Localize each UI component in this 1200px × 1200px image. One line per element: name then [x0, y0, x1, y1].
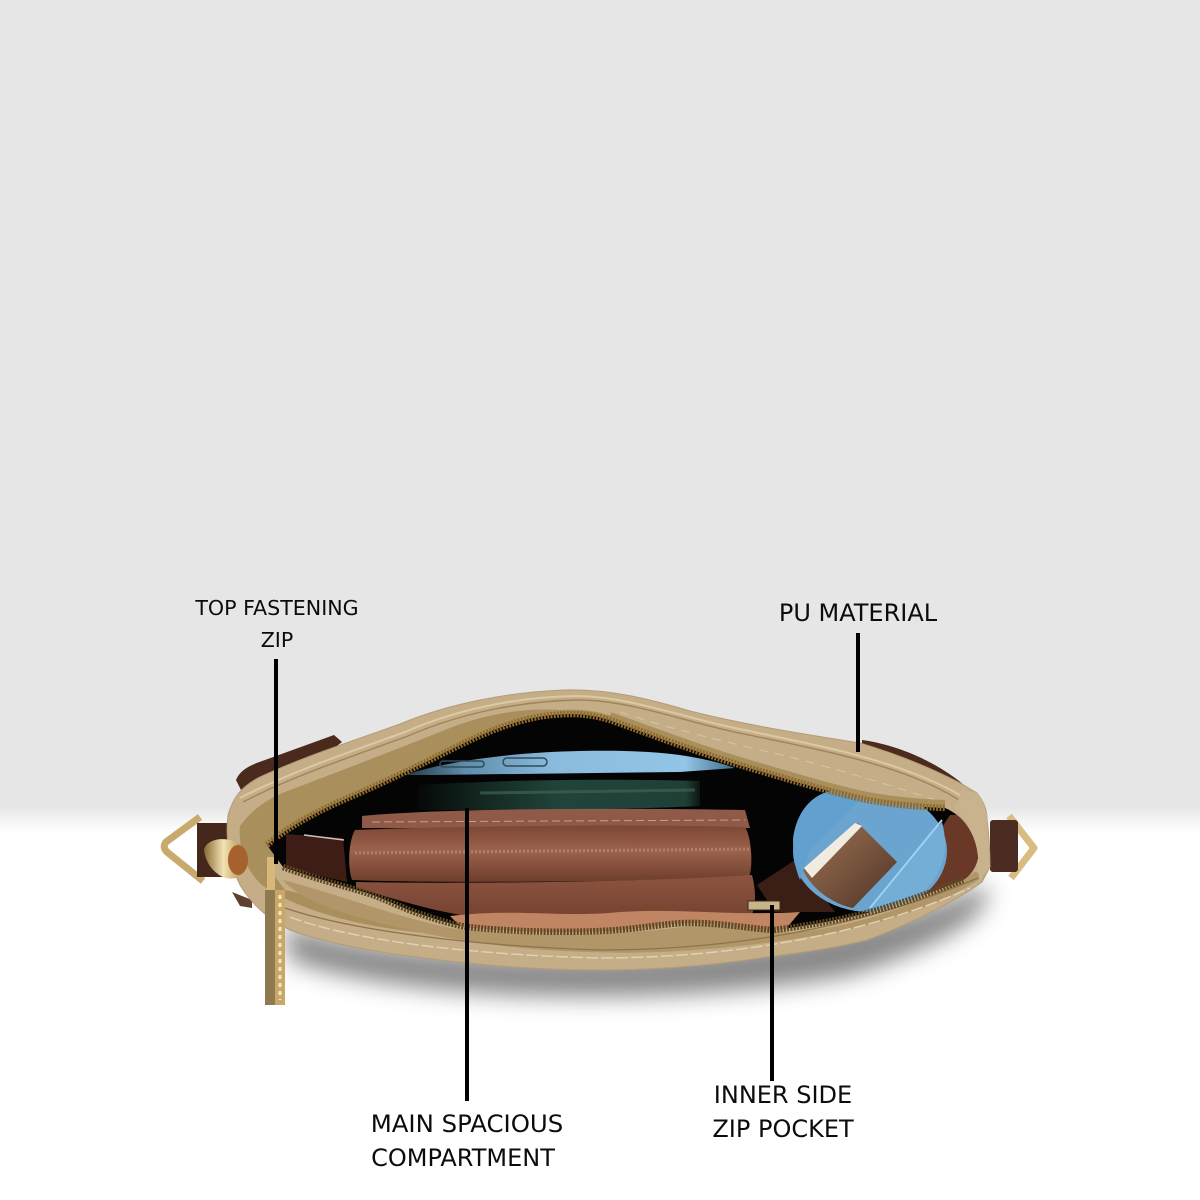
zip tape left, wide: [240, 710, 640, 940]
callout: top fastening zip: TOP FASTENING: [194, 596, 359, 620]
brown wallet lower: [356, 875, 755, 915]
callout: top fastening zip: ZIP: [261, 628, 293, 652]
copper lining fold: [450, 910, 800, 932]
top zip teeth: [267, 714, 945, 845]
green notebook: [418, 780, 700, 810]
flap stitches: [620, 712, 935, 800]
inner pocket zip puller: [748, 901, 780, 910]
icon: right triangular ring: [1009, 816, 1034, 878]
callout: main spacious compartment: [371, 808, 563, 1172]
callout: PU material: [779, 599, 938, 752]
brown wallet flap: [362, 809, 750, 828]
zip pull bar: [265, 857, 285, 1005]
top zip tape: [610, 716, 945, 804]
icon: small brown nub: [232, 892, 252, 908]
icon: left triangular ring: [164, 817, 203, 881]
interior dark: [267, 714, 978, 932]
callout: main spacious compartment: MAIN SPACIOUS: [371, 1109, 563, 1138]
bag mouth interior: [267, 714, 978, 932]
bag illustration: [164, 690, 1034, 1005]
icon: left strap end: [197, 823, 227, 877]
right side lighter edge: [955, 790, 990, 880]
bottom lip seam: [290, 888, 970, 958]
callout: inner side zip pocket: ZIP POCKET: [712, 1115, 854, 1143]
bottle cork insert: [803, 823, 897, 908]
bag body outer: [227, 690, 990, 970]
callout: PU material: PU MATERIAL: [779, 599, 938, 627]
blue bottle lid: [793, 790, 947, 912]
callout: main spacious compartment: COMPARTMENT: [371, 1144, 555, 1172]
callout: inner side zip pocket: [712, 905, 854, 1143]
top flap seam: [240, 696, 978, 808]
bottom pocket lip shading: [283, 872, 985, 953]
bottle light right segment: [872, 822, 945, 908]
right lining: [926, 815, 978, 894]
icon: right strap tab behind bag: [862, 740, 975, 796]
phone buttons: [440, 758, 547, 767]
icon: left strap tab behind bag: [236, 735, 342, 800]
drop shadow under bag: [285, 885, 987, 996]
callout: top fastening zip: [194, 596, 359, 864]
dark bottle base: [757, 860, 835, 912]
brown dark tab: [286, 834, 347, 882]
brown wallet upper: [349, 826, 751, 882]
zip pull head: [204, 839, 247, 879]
bottom zip teeth: [283, 867, 963, 932]
icon: right strap end: [990, 820, 1018, 872]
phone: [405, 751, 735, 775]
callout: inner side zip pocket: INNER SIDE: [714, 1081, 852, 1109]
